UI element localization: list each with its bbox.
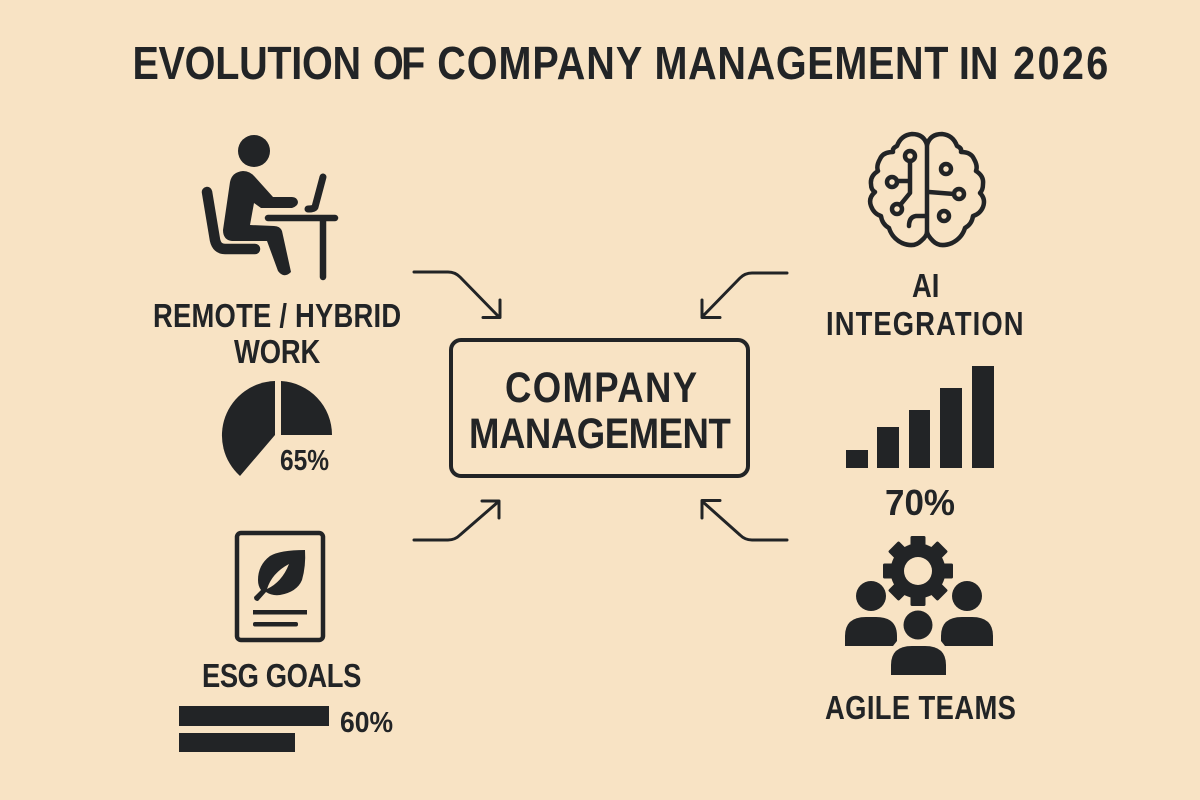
label: remote / hybrid work: REMOTE / HYBRID — [153, 299, 401, 335]
icon: agile team with gear — [845, 536, 993, 675]
label: remote / hybrid work: WORK — [234, 335, 320, 371]
icon: ESG document with leaf — [237, 533, 323, 640]
label: agile teams: AGILE TEAMS — [825, 691, 1016, 727]
title: IN — [959, 38, 1009, 90]
icon: brain with circuit — [870, 134, 984, 245]
bar chart: 70%: 70% — [885, 482, 955, 523]
title: 2026 — [1013, 38, 1111, 90]
title: MANAGEMENT — [654, 38, 961, 90]
label: ESG goals: ESG GOALS — [202, 659, 361, 695]
bar chart: 70% — [846, 366, 994, 523]
bar indicator: 60%: 60% — [340, 707, 393, 739]
pie chart: 65% — [222, 381, 332, 477]
pie chart: 65%: 65% — [280, 445, 329, 477]
title: COMPANY — [437, 38, 654, 90]
label: AI integration: INTEGRATION — [826, 307, 1024, 343]
arrow: bottom left — [414, 501, 499, 540]
label: remote / hybrid work — [153, 299, 401, 371]
label: AI integration: AI — [912, 269, 939, 305]
arrow: bottom right — [702, 500, 787, 540]
arrow: top left — [414, 272, 500, 318]
arrow: top right — [702, 273, 787, 318]
center box: company management — [451, 340, 748, 476]
label: AI integration — [826, 269, 1024, 343]
center box: company management: MANAGEMENT — [469, 410, 731, 458]
bar indicator: 60% — [179, 706, 393, 752]
center box: company management: COMPANY — [505, 364, 697, 412]
title: EVOLUTION — [132, 38, 372, 90]
title: OF — [373, 38, 431, 90]
icon: person at desk with laptop — [207, 135, 335, 277]
